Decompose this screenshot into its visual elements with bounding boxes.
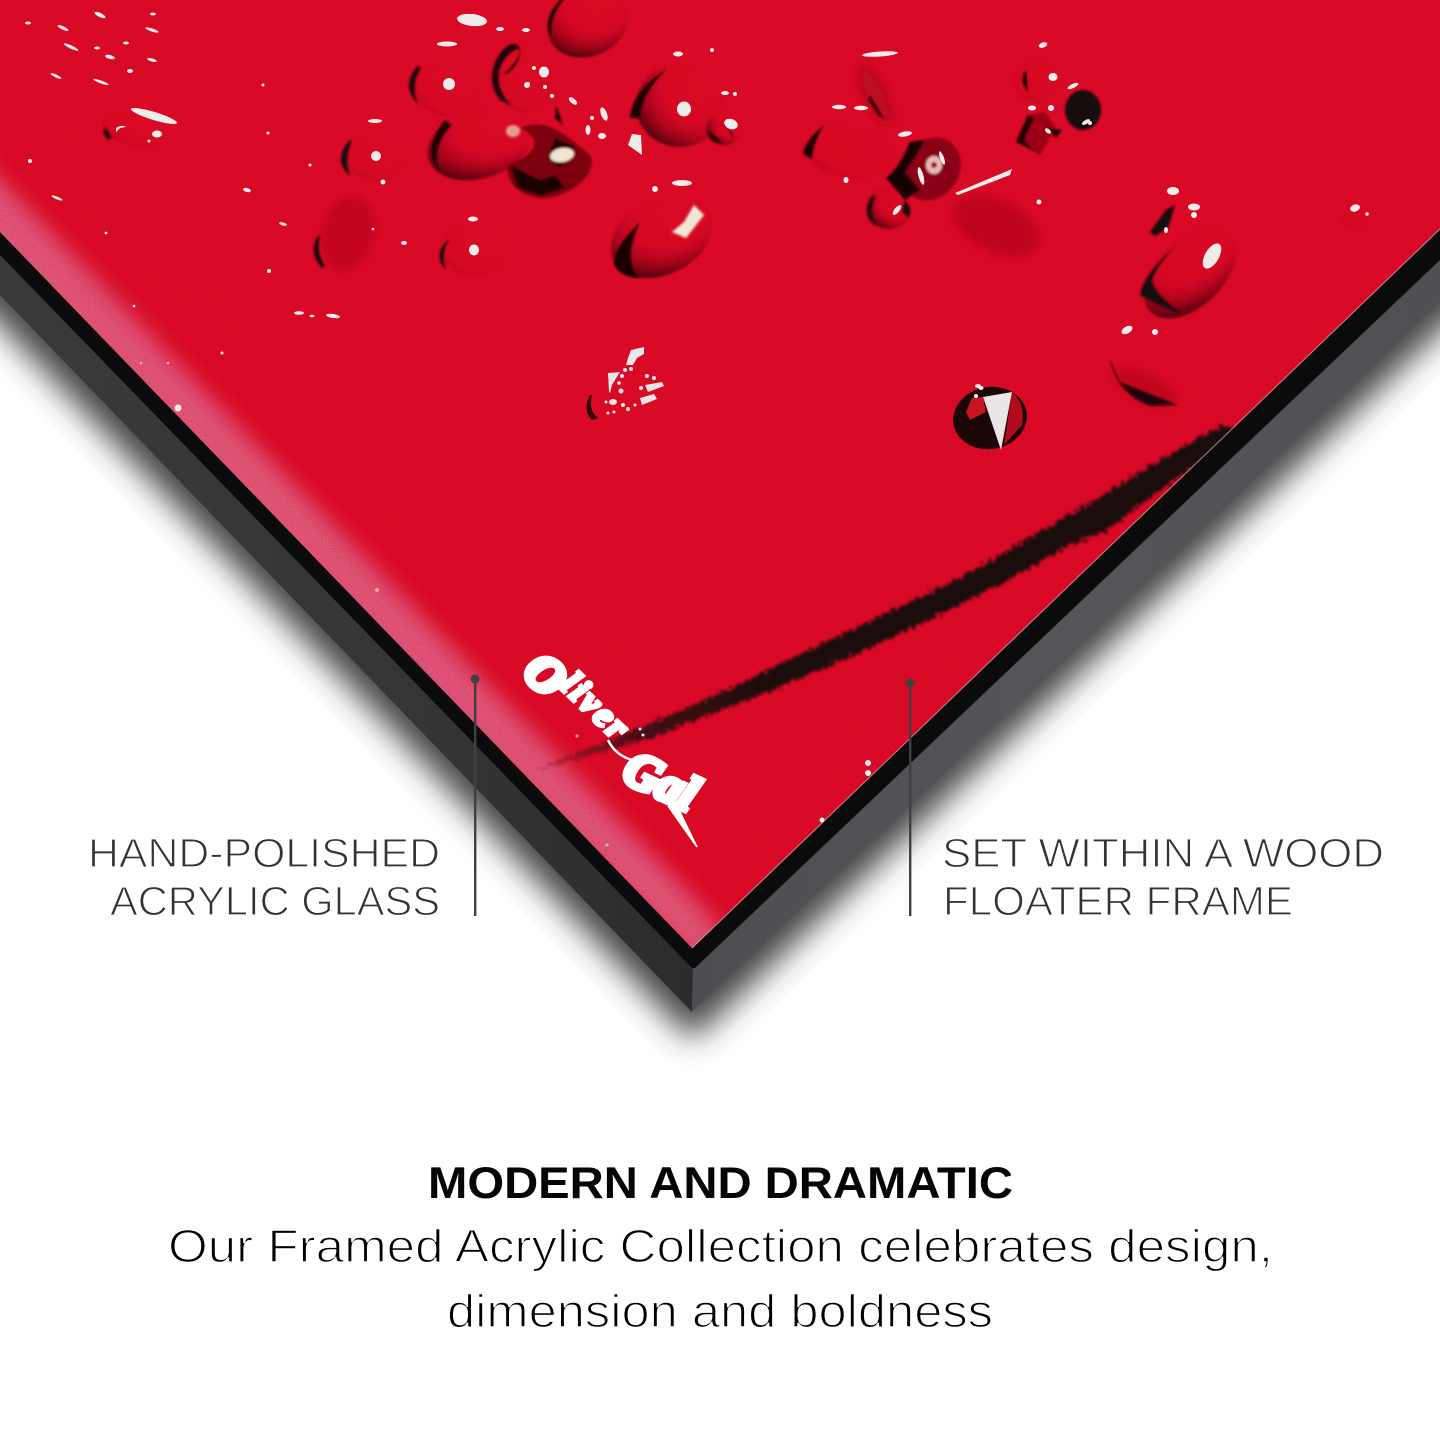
label: hand-polished acrylic glass: ACRYLIC GLASS: [110, 878, 440, 924]
droplets cluster: top centre: [341, 0, 742, 295]
callout line: floater frame: [906, 678, 914, 916]
description text: Our Framed Acrylic Collection celebrates design,: [168, 1220, 1273, 1272]
pink glare along left edge: [0, 138, 722, 970]
description text: [168, 1220, 1273, 1337]
speckled droplet: [586, 347, 664, 420]
red acrylic artwork: [0, 0, 1440, 970]
label: hand-polished acrylic glass: [88, 830, 440, 924]
droplets: left: [102, 122, 376, 272]
frame black inner lip: [0, 229, 1440, 968]
heading: MODERN AND DRAMATIC: [428, 1159, 1013, 1208]
label: set within a wood floater frame: SET WITHIN A WOOD: [942, 830, 1384, 876]
artist signature: [524, 656, 707, 848]
black brush stroke: [530, 425, 1240, 772]
white speckles: [25, 11, 1369, 823]
label: hand-polished acrylic glass: HAND-POLISHED: [88, 830, 440, 876]
diamond droplet: [953, 386, 1027, 450]
artist signature: Gal: [615, 739, 707, 822]
film grain: [0, 0, 1440, 960]
callout line: acrylic glass: [470, 674, 480, 916]
frame side: left: [0, 255, 693, 1012]
thin white glass edge highlight: [692, 229, 1440, 948]
artist signature: liver: [553, 664, 639, 749]
artist signature: O: [513, 642, 578, 707]
droplets cluster: top right: [803, 58, 1368, 415]
description text: dimension and boldness: [447, 1285, 993, 1337]
frame side: right: [692, 260, 1440, 1012]
label: set within a wood floater frame: [942, 830, 1384, 924]
frame drop shadow: [0, 120, 1440, 1040]
label: set within a wood floater frame: FLOATER FRAME: [943, 878, 1293, 924]
